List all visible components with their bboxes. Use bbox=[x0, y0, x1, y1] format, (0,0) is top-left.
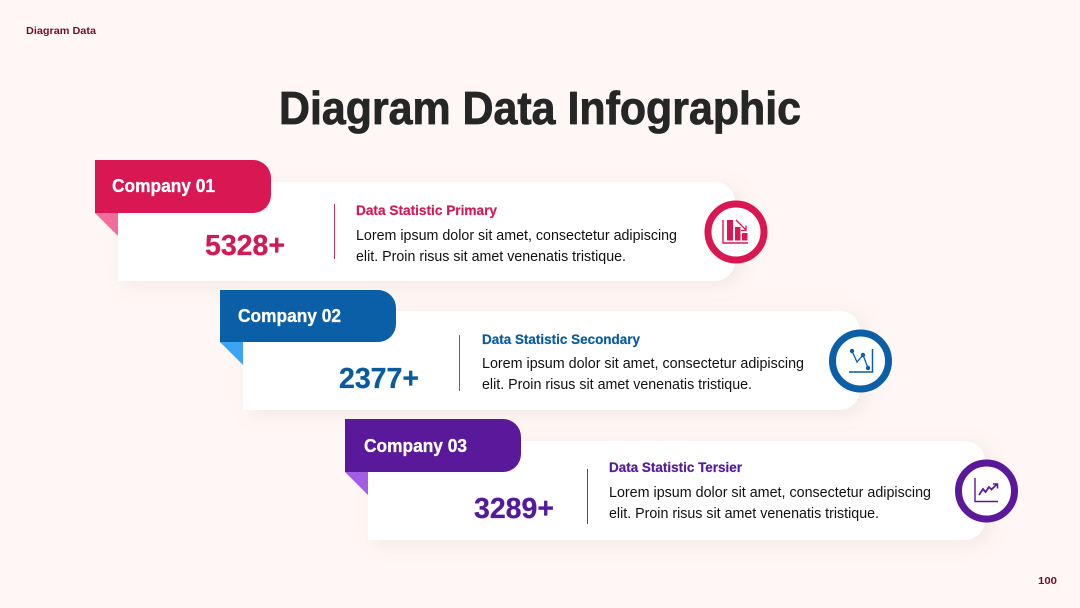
body text 02 bbox=[482, 356, 804, 393]
body text 03: elit. Proin risus sit amet venenatis tristique. bbox=[609, 506, 879, 522]
heading 03: Data Statistic Tersier bbox=[609, 459, 743, 475]
tab 02 bbox=[220, 290, 396, 342]
header label: Diagram Data bbox=[26, 26, 96, 37]
number 02: 2377+ bbox=[339, 363, 419, 395]
body text 01: Lorem ipsum dolor sit amet, consectetur adipiscing bbox=[356, 228, 677, 244]
icon: scatter line chart bbox=[832, 333, 888, 389]
card 03 background bbox=[368, 441, 985, 540]
panel: company 02 bbox=[220, 290, 888, 410]
body text 03: Lorem ipsum dolor sit amet, consectetur adipiscing bbox=[609, 485, 931, 501]
body text 01: elit. Proin risus sit amet venenatis tristique. bbox=[356, 249, 626, 265]
fold 01 bbox=[95, 213, 118, 236]
number 01: 5328+ bbox=[205, 230, 285, 262]
body text 03 bbox=[609, 485, 931, 522]
heading 02: Data Statistic Secondary bbox=[482, 331, 640, 347]
card 01 background bbox=[118, 182, 735, 281]
body text 02: elit. Proin risus sit amet venenatis tristique. bbox=[482, 377, 752, 393]
page number: 100 bbox=[1038, 575, 1057, 587]
heading 01: Data Statistic Primary bbox=[356, 202, 497, 218]
icon: rising line chart bbox=[958, 463, 1014, 519]
title: Diagram Data Infographic bbox=[279, 82, 801, 134]
panel: company 03 bbox=[345, 419, 1014, 540]
tab label 03: Company 03 bbox=[364, 435, 467, 456]
panel: company 01 bbox=[95, 160, 764, 281]
number 03: 3289+ bbox=[474, 493, 554, 525]
fold 03 bbox=[345, 472, 368, 495]
tab label 02: Company 02 bbox=[238, 305, 341, 326]
tab 01 bbox=[95, 160, 271, 213]
fold 02 bbox=[220, 342, 243, 365]
card 02 background bbox=[243, 311, 860, 410]
body text 02: Lorem ipsum dolor sit amet, consectetur adipiscing bbox=[482, 356, 804, 372]
tab label 01: Company 01 bbox=[112, 175, 215, 196]
tab 03 bbox=[345, 419, 521, 472]
icon: bar chart falling bbox=[708, 204, 764, 260]
body text 01 bbox=[356, 228, 677, 265]
